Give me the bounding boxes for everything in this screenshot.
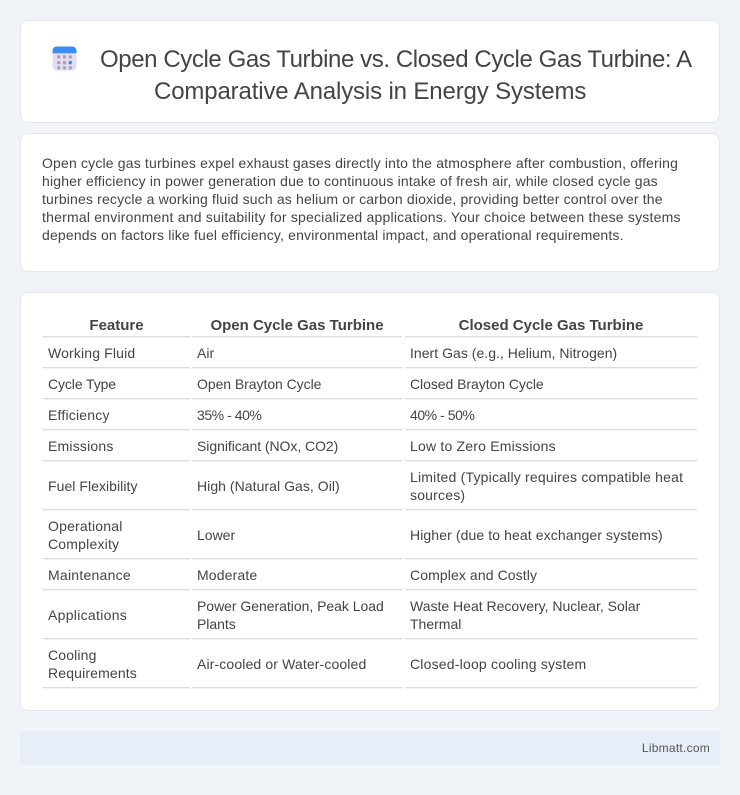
row: operational complexity: Operational: [48, 518, 123, 534]
icon: calendar: [52, 46, 76, 70]
row: working fluid: Inert Gas (e.g., Helium, Nitrogen): [410, 345, 617, 361]
row: operational complexity: Complexity: [48, 536, 119, 552]
row: cooling requirements: [48, 647, 586, 681]
intro paragraph: higher efficiency in power generation due to continuous intake of fresh air, while closed cycle gas: [42, 173, 658, 189]
footer bar: [20, 731, 720, 765]
row: working fluid: Air: [197, 345, 214, 361]
intro paragraph: turbines recycle a working fluid such as helium or carbon dioxide, providing better control over the: [42, 191, 663, 207]
row: operational complexity: Higher (due to heat exchanger systems): [410, 527, 663, 543]
row: fuel flexibility: sources): [410, 487, 465, 503]
title: [100, 46, 692, 105]
title: Open Cycle Gas Turbine vs. Closed Cycle Gas Turbine: A: [100, 46, 692, 73]
footer credit: Libmatt.com: [642, 741, 710, 755]
row: applications: Thermal: [410, 616, 461, 632]
header: closed cycle gas turbine: Closed Cycle Gas Turbine: [459, 317, 643, 334]
header: feature: Feature: [89, 317, 144, 334]
row: operational complexity: Lower: [197, 527, 235, 543]
row: emissions: Significant (NOx, CO2): [197, 438, 338, 454]
intro text panel: [20, 133, 720, 272]
row: cooling requirements: Air-cooled or Water-cooled: [197, 656, 366, 672]
row: operational complexity: [48, 518, 663, 552]
row: maintenance: Moderate: [197, 567, 257, 583]
header panel: [20, 20, 720, 123]
row: applications: Waste Heat Recovery, Nuclear, Solar: [410, 598, 640, 614]
row: applications: [48, 598, 640, 632]
row: applications: Applications: [48, 607, 127, 623]
table: [43, 317, 697, 689]
title: Comparative Analysis in Energy Systems: [154, 78, 586, 105]
row: efficiency: Efficiency: [48, 407, 110, 423]
intro paragraph: depends on factors like fuel efficiency, environmental impact, and operational requirements.: [42, 227, 624, 243]
row: efficiency: [48, 407, 474, 423]
row: emissions: Emissions: [48, 438, 114, 454]
row: fuel flexibility: [48, 469, 683, 503]
row: maintenance: [48, 567, 537, 583]
row: cycle type: Open Brayton Cycle: [197, 376, 321, 392]
row: cycle type: Cycle Type: [48, 376, 116, 392]
intro paragraph: Open cycle gas turbines expel exhaust gases directly into the atmosphere after combustion, offering: [42, 155, 678, 171]
row: maintenance: Maintenance: [48, 567, 131, 583]
comparison table panel: [20, 292, 720, 711]
row: working fluid: [48, 345, 617, 361]
row: emissions: [48, 438, 556, 454]
row: fuel flexibility: Limited (Typically requires compatible heat: [410, 469, 683, 485]
row: cooling requirements: Cooling: [48, 647, 97, 663]
row: applications: Plants: [197, 616, 236, 632]
row: applications: Power Generation, Peak Load: [197, 598, 384, 614]
row: cycle type: Closed Brayton Cycle: [410, 376, 544, 392]
row: efficiency: 40% - 50%: [410, 407, 474, 423]
row: maintenance: Complex and Costly: [410, 567, 537, 583]
row: cycle type: [48, 376, 544, 392]
row: efficiency: 35% - 40%: [197, 407, 261, 423]
row: fuel flexibility: Fuel Flexibility: [48, 478, 138, 494]
intro paragraph: thermal environment and suitability for specialized applications. Your choice between these systems: [42, 209, 681, 225]
row: cooling requirements: Requirements: [48, 665, 137, 681]
row: emissions: Low to Zero Emissions: [410, 438, 556, 454]
row: fuel flexibility: High (Natural Gas, Oil): [197, 478, 340, 494]
row: cooling requirements: Closed-loop cooling system: [410, 656, 586, 672]
header: open cycle gas turbine: Open Cycle Gas Turbine: [210, 317, 384, 334]
intro paragraph: [42, 155, 681, 243]
row: working fluid: Working Fluid: [48, 345, 135, 361]
